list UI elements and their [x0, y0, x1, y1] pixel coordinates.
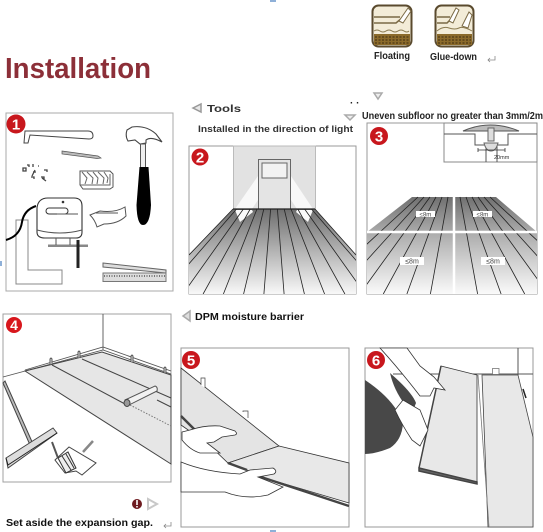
lifted plank [419, 366, 477, 483]
markers [0, 0, 276, 532]
icon: rulers [103, 263, 166, 282]
badge 5: 5 [187, 352, 195, 370]
broom [3, 381, 57, 468]
badge 1 [6, 114, 26, 134]
dpm sheet [25, 352, 171, 464]
panel 1: tools [6, 113, 173, 291]
panel 5: joining boards [181, 348, 349, 527]
badge 4 [6, 317, 22, 333]
badge 5 [182, 351, 200, 370]
panel 2: direction of light [188, 146, 356, 294]
back wall [234, 146, 316, 209]
label: floating: Floating [374, 51, 410, 62]
icon: glue-down [436, 6, 474, 46]
badge 1: 1 [12, 116, 20, 134]
dots: · · [350, 98, 359, 109]
icon: return mark [164, 522, 171, 528]
icon: sandpaper [90, 207, 126, 227]
room lines [3, 314, 171, 377]
icon: wood block [80, 171, 113, 189]
sheet seams [52, 359, 171, 407]
badge 6 [367, 351, 385, 370]
floor [189, 208, 356, 294]
dustpan [52, 441, 96, 475]
icon: floating [372, 6, 412, 46]
measure labels: ≤8m [477, 212, 488, 218]
wall lines [393, 348, 533, 375]
icon: nails [23, 164, 47, 181]
icon: pry bar [24, 131, 93, 143]
spacer [492, 368, 499, 374]
measure labels: ≤8m [420, 212, 431, 218]
heading: dpm: DPM moisture barrier [195, 311, 304, 323]
heading: tools: Tools [207, 103, 241, 115]
title: Installation [5, 53, 151, 85]
measure labels: ≤8m [486, 258, 500, 266]
panel 3: uneven subfloor [366, 122, 538, 294]
knee [365, 380, 403, 454]
badge 4: 4 [10, 317, 18, 333]
light beams [235, 176, 313, 209]
spacers [201, 378, 248, 418]
second plank [228, 446, 349, 503]
icon: hammer [126, 127, 162, 225]
icon: tools bullet [193, 104, 201, 112]
icon: warning bullet [132, 499, 142, 509]
lower hand [395, 400, 428, 446]
icon: jigsaw [6, 198, 88, 268]
icon: small bullet top [374, 93, 382, 99]
badge 2: 2 [196, 150, 204, 166]
icon: return mark [488, 56, 495, 62]
badge 6: 6 [372, 352, 380, 370]
icon: grey bullet [148, 499, 157, 509]
heading: direction of light: Installed in the direction of light [198, 124, 354, 135]
icon: dpm bullet [183, 311, 190, 321]
upper hand [380, 348, 445, 396]
label: glue-down: Glue-down [430, 52, 477, 63]
floor [367, 196, 537, 294]
upper hand [182, 426, 236, 453]
panel 6: laying boards [365, 348, 533, 527]
badge 3 [370, 127, 388, 146]
lower hand [181, 462, 283, 497]
measure labels: ≤8m [405, 258, 419, 266]
plank edges [181, 416, 349, 506]
inset: expansion profile [444, 123, 537, 162]
icon: light bullet [345, 115, 355, 120]
icon: square ruler [16, 220, 62, 284]
panel 4: moisture barrier [3, 314, 171, 482]
inset: expansion profile: 20mm [494, 155, 510, 161]
badge 2 [192, 148, 208, 166]
icon: pencil [62, 151, 101, 158]
spacers [50, 351, 166, 373]
badge 3: 3 [375, 128, 383, 146]
fixed plank [482, 375, 533, 527]
first plank [181, 368, 279, 463]
measure labels [400, 211, 505, 266]
door [258, 160, 290, 210]
roll [124, 386, 157, 406]
caption: expansion gap: Set aside the expansion gap. [6, 517, 153, 529]
